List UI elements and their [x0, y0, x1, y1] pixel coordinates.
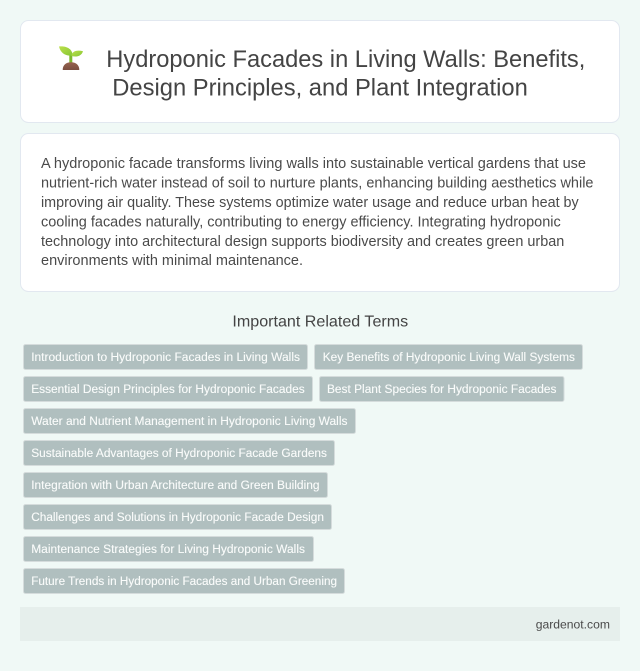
tag: introduction: Introduction to Hydroponic Facades in Living Walls: [31, 350, 300, 364]
title: Design Principles, and Plant Integration: [112, 75, 528, 102]
title: Hydroponic Facades in Living Walls: Benefits,: [106, 46, 585, 73]
text block: description: technology into architectural design supports biodiversity and creates green urban: [41, 234, 564, 250]
text block: description: cooling facades naturally, contributing to energy efficiency. Integrating hydroponic: [41, 214, 561, 230]
footer: gardenot.com: [536, 617, 610, 631]
tag: plant species: Best Plant Species for Hydroponic Facades: [327, 382, 556, 396]
tag: water and nutrient: [24, 408, 356, 434]
text block: description: A hydroponic facade transforms living walls into sustainable vertical gardens that use: [41, 156, 586, 172]
tag: key benefits: [314, 344, 582, 370]
tag: key benefits: Key Benefits of Hydroponic Living Wall Systems: [323, 350, 575, 364]
tag: water and nutrient: Water and Nutrient Management in Hydroponic Living Walls: [31, 414, 347, 428]
tag: sustainable advantages: [24, 440, 334, 466]
tag list: [24, 344, 582, 594]
tag: introduction: [24, 344, 308, 370]
tag: plant species: [320, 376, 564, 402]
tag: urban architecture: [24, 472, 328, 498]
heading: important related terms: Important Related Terms: [232, 314, 408, 330]
tag: future trends: [24, 568, 344, 594]
text block: description: improving air quality. These systems optimize water usage and reduce urban heat by: [41, 195, 579, 211]
title: [106, 46, 585, 102]
panel: title card: [20, 20, 620, 122]
footer: [20, 607, 620, 641]
tag: design principles: [24, 376, 312, 402]
panel: description card: [20, 134, 620, 292]
tag: maintenance: Maintenance Strategies for Living Hydroponic Walls: [31, 542, 305, 556]
text block: description: environments with minimal maintenance.: [41, 253, 303, 269]
tag: challenges: Challenges and Solutions in Hydroponic Facade Design: [31, 510, 324, 524]
tag: future trends: Future Trends in Hydroponic Facades and Urban Greening: [31, 574, 337, 588]
icon: seedling: [59, 46, 83, 70]
text block: description: nutrient-rich water instead of soil to nurture plants, enhancing building aesthetics while: [41, 175, 594, 191]
text block: description: [41, 156, 594, 269]
tag: design principles: Essential Design Principles for Hydroponic Facades: [31, 382, 305, 396]
tag: sustainable advantages: Sustainable Advantages of Hydroponic Facade Gardens: [31, 446, 327, 460]
tag: urban architecture: Integration with Urban Architecture and Green Building: [31, 478, 320, 492]
tag: maintenance: [24, 536, 314, 562]
tag: challenges: [24, 504, 332, 530]
